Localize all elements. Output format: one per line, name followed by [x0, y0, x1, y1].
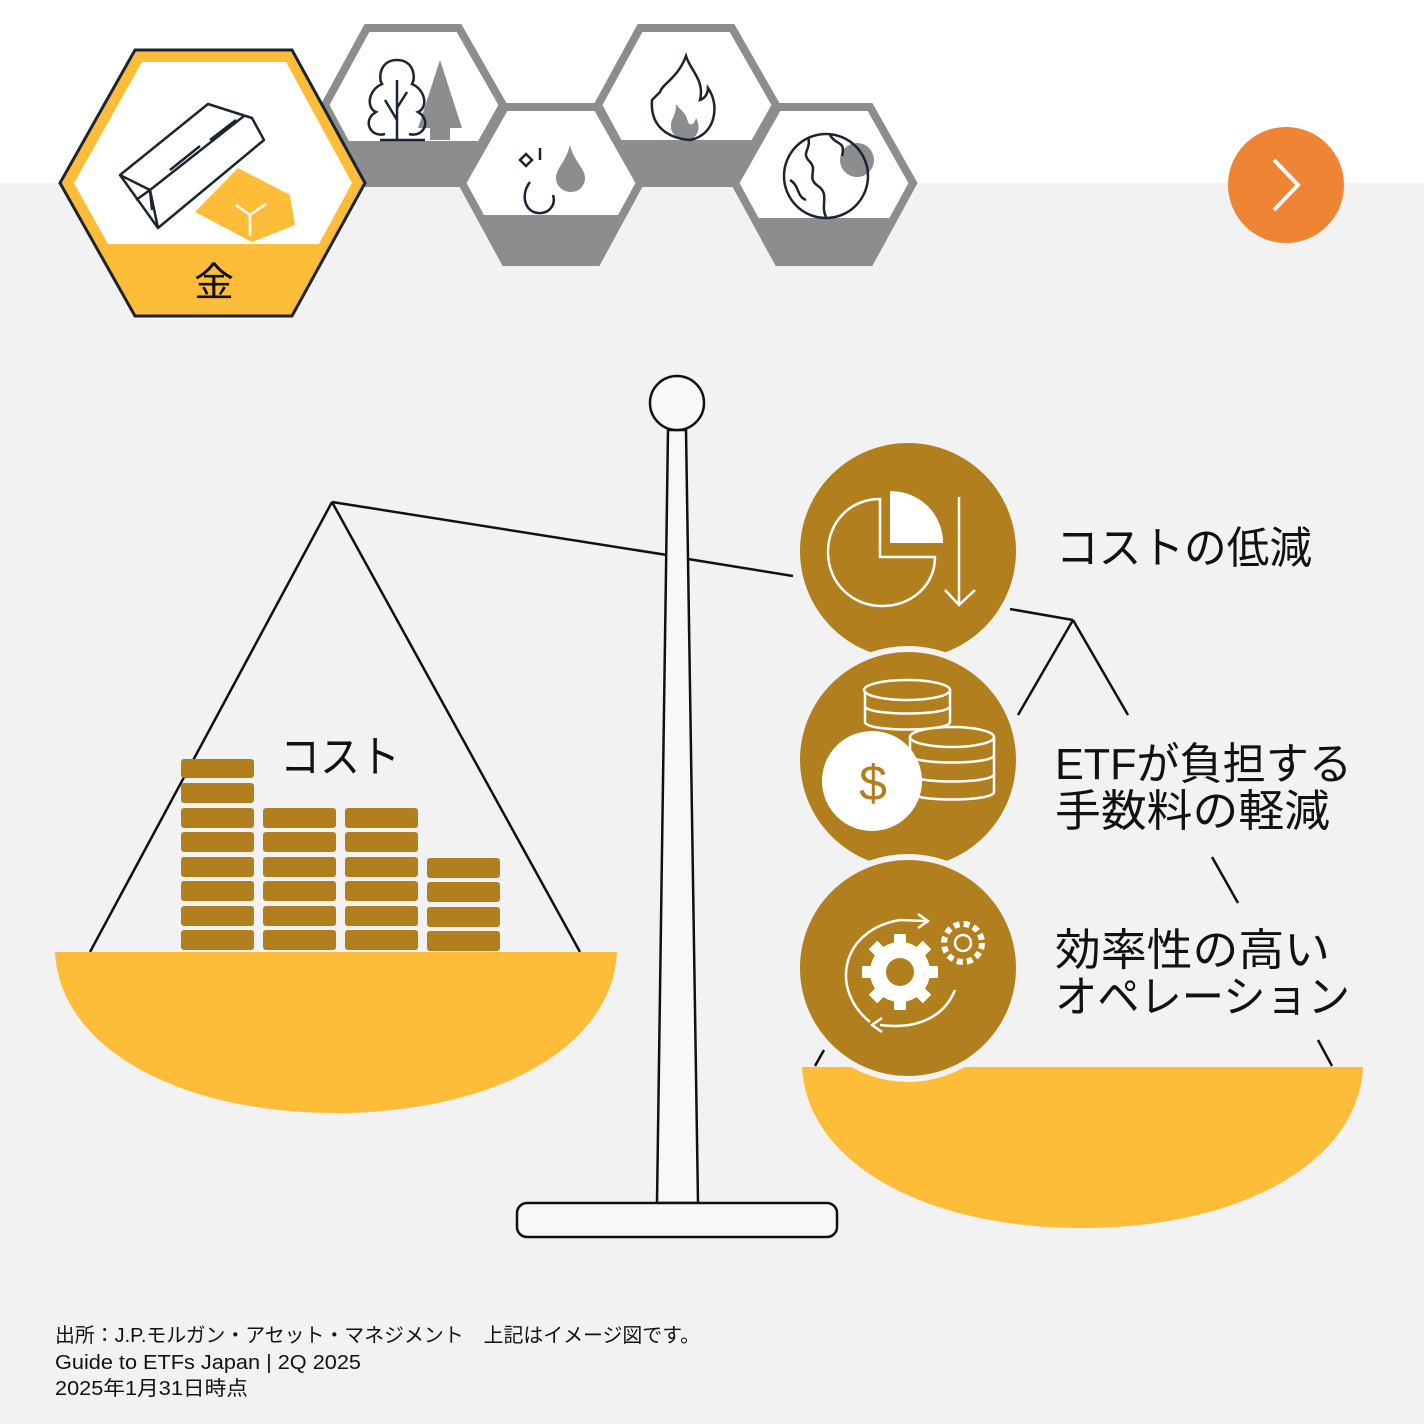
scale: post	[517, 376, 837, 1237]
circle: cost reduction icon	[797, 440, 1019, 662]
hexagon: fire	[590, 28, 780, 190]
right labels: オペレーション	[1055, 973, 1350, 1022]
circle: fee reduction icon	[797, 649, 1019, 871]
hexagon: gold (selected)	[60, 50, 370, 324]
hexagon: globe	[730, 107, 920, 268]
circle: efficient operation icon	[797, 857, 1019, 1079]
circle: fee reduction icon: $	[859, 755, 887, 811]
right labels: 手数料の軽減	[1055, 787, 1330, 836]
left pan	[55, 952, 617, 1113]
hexagon: tree (forestry)	[320, 28, 510, 191]
right labels: ETFが負担する	[1055, 740, 1352, 789]
footer source: Guide to ETFs Japan | 2Q 2025	[55, 1352, 361, 1374]
hexagon: water drop	[455, 107, 645, 265]
right labels: 効率性の高い	[1055, 926, 1330, 975]
label: コスト: コスト	[280, 733, 400, 782]
right pan	[802, 1067, 1363, 1228]
icon: gold bars	[120, 104, 295, 242]
right labels	[1055, 524, 1352, 1022]
footer source: 出所：J.P.モルガン・アセット・マネジメント 上記はイメージ図です。	[55, 1324, 700, 1347]
button: next arrow	[1228, 127, 1344, 243]
right labels: コストの低減	[1056, 524, 1312, 573]
scale: beam and strings	[90, 502, 1332, 1066]
label: 金: 金	[194, 261, 234, 305]
coin stacks	[181, 759, 500, 951]
footer source: 2025年1月31日時点	[55, 1377, 248, 1400]
footer source	[55, 1324, 700, 1400]
